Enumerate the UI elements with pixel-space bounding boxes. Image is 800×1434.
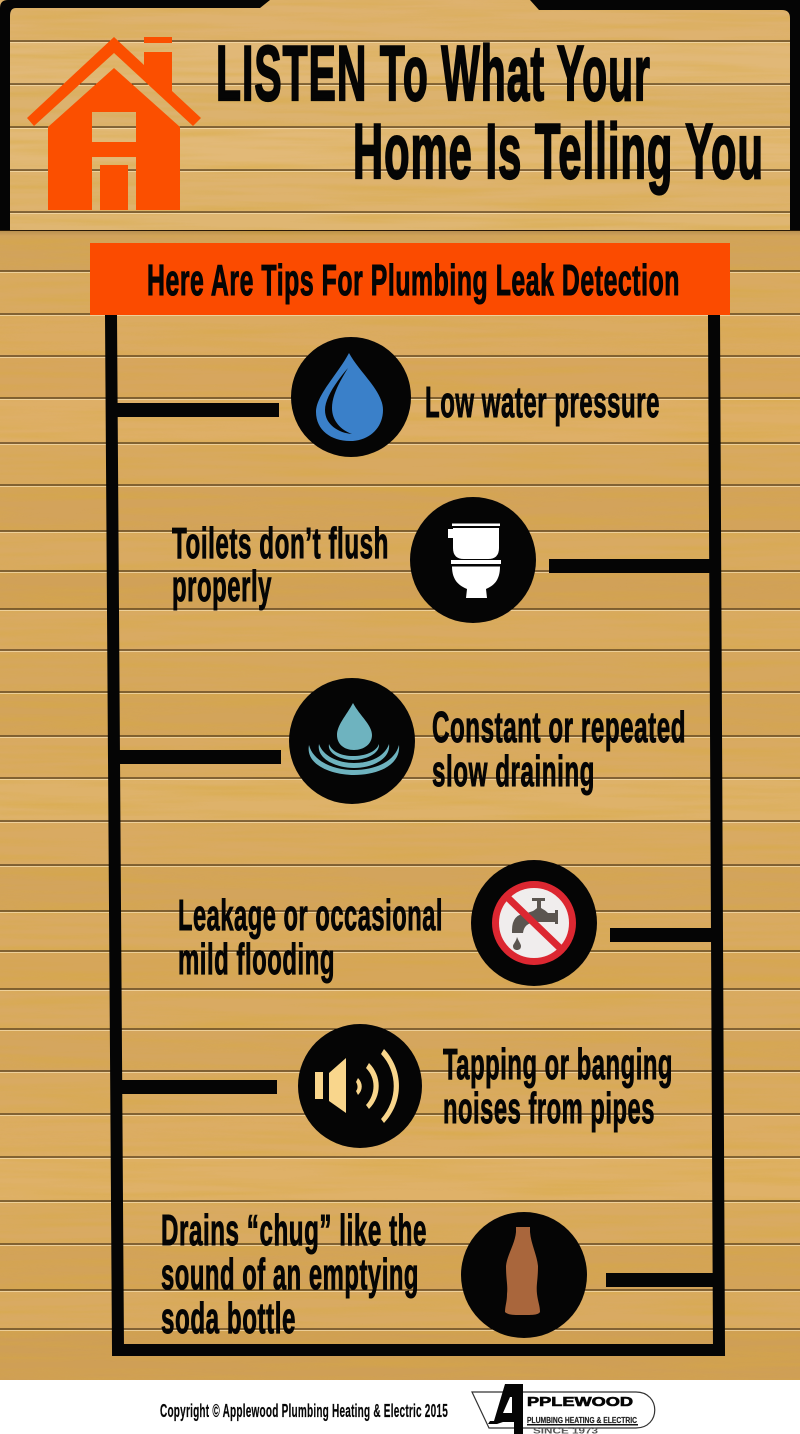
logo: Applewood	[472, 1384, 655, 1434]
top frame right bracket	[530, 0, 800, 230]
tip 5: tapping or banging noises from pipes	[120, 1024, 673, 1148]
tip 6: drains chug like an emptying soda bottle: Drains “chug” like the	[161, 1206, 427, 1255]
tip 6: drains chug like an emptying soda bottle: sound of an emptying	[161, 1250, 419, 1299]
title	[216, 29, 764, 195]
logo: Applewood: PLUMBING HEATING & ELECTRIC	[527, 1416, 637, 1425]
copyright: Copyright © Applewood Plumbing Heating & Electric 2015	[160, 1401, 448, 1421]
heading banner	[90, 243, 730, 315]
logo: Applewood: PPLEWOOD	[527, 1395, 633, 1409]
footer strip	[0, 1380, 800, 1434]
tip 4: leakage or occasional mild flooding	[178, 860, 715, 986]
icon: house	[27, 37, 201, 210]
tip 6: drains chug like an emptying soda bottle: soda bottle	[161, 1294, 296, 1343]
top frame left bracket	[0, 0, 270, 230]
tip 2: toilets don't flush properly: Toilets don’t flush	[172, 519, 389, 568]
connector frame	[111, 315, 719, 1350]
tip 4: leakage or occasional mild flooding: mild flooding	[178, 935, 335, 984]
tip 6: drains chug like an emptying soda bottle	[161, 1206, 715, 1343]
tip 3: constant or repeated slow draining: slow draining	[432, 747, 595, 796]
tip 2: toilets don't flush properly: properly	[172, 562, 272, 611]
tip 4: leakage or occasional mild flooding: Leakage or occasional	[178, 891, 443, 940]
tip 3: constant or repeated slow draining	[117, 678, 686, 804]
tip 1: low water pressure	[114, 337, 660, 457]
tip 2: toilets don't flush properly	[172, 497, 715, 623]
